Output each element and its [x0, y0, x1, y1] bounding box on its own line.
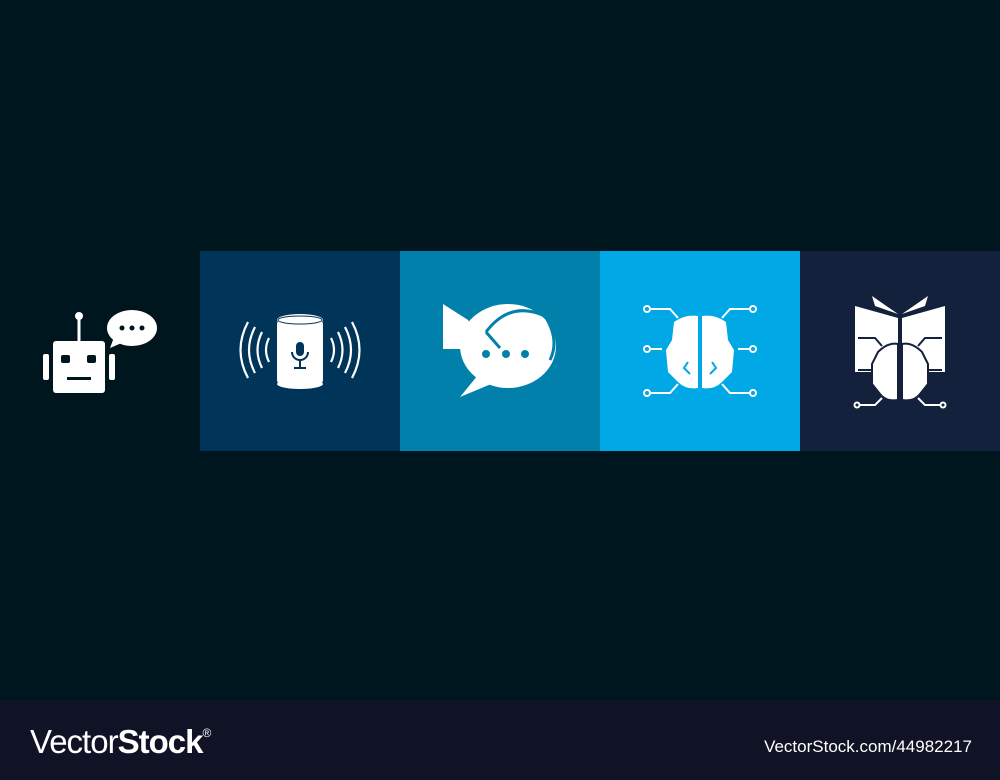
- icon: reply chat bubble: [443, 304, 556, 397]
- panel: chat reply: [400, 251, 600, 451]
- panel: AI brain: [600, 251, 800, 451]
- icon: speaker with mic: [240, 314, 360, 389]
- panel: smart speaker: [200, 251, 400, 451]
- panel: book brain: [800, 251, 1000, 451]
- icon: circuit brain: [644, 306, 756, 396]
- footer id text: VectorStock.com/44982217: [764, 737, 972, 756]
- footer logo text: ®: [202, 726, 211, 740]
- footer logo text: VectorStock: [30, 723, 202, 760]
- footer bar: [0, 700, 1000, 780]
- icon: robot with speech bubble: [43, 310, 157, 393]
- icon: book with brain: [854, 296, 946, 408]
